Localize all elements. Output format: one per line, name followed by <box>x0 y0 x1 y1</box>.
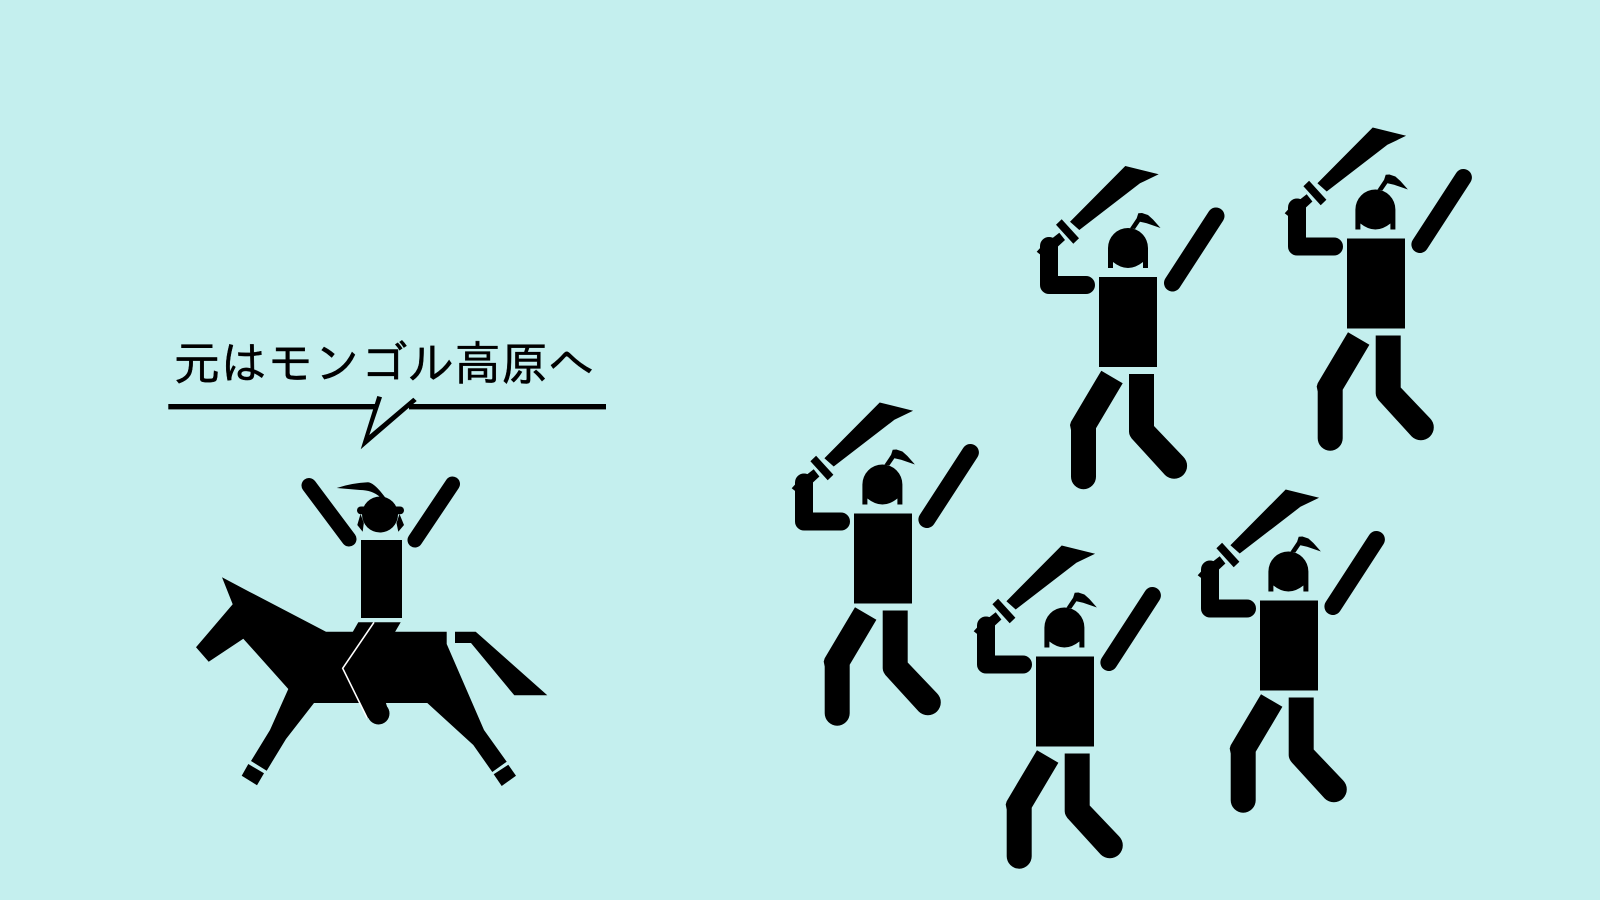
rider left arm <box>309 486 349 539</box>
warrior 5 <box>1198 490 1376 813</box>
head <box>1044 592 1097 648</box>
sword <box>1297 128 1406 208</box>
head <box>1268 536 1321 592</box>
raised arm <box>1109 596 1152 662</box>
horse and rider <box>196 482 547 786</box>
raised arm <box>1172 216 1216 283</box>
body <box>1347 238 1405 328</box>
warrior 2 <box>1285 128 1463 451</box>
rider body <box>361 540 402 618</box>
raised arm <box>1420 178 1463 244</box>
raised arm <box>927 452 970 520</box>
warrior 3 <box>792 402 970 726</box>
legs <box>824 607 941 726</box>
head <box>1355 174 1408 230</box>
head <box>1108 213 1160 268</box>
sword arm <box>1285 208 1334 246</box>
body <box>1036 656 1094 746</box>
sword <box>986 546 1095 626</box>
warrior 4 <box>974 546 1152 869</box>
body <box>1099 277 1157 367</box>
sword arm <box>792 482 841 522</box>
horse tail <box>455 632 547 695</box>
horse rear hoof <box>494 765 516 786</box>
rider head <box>337 482 404 532</box>
sword <box>804 402 913 483</box>
legs <box>1230 694 1347 813</box>
rider leg <box>343 622 401 724</box>
sword arm <box>1037 246 1086 285</box>
heading: speech text: 元はモンゴル高原へ <box>174 338 595 390</box>
sword arm <box>974 626 1023 664</box>
speech line with lightning tail <box>168 396 606 449</box>
sword <box>1210 490 1319 570</box>
sword arm <box>1198 570 1247 608</box>
horse front hoof <box>242 764 264 785</box>
horse body <box>196 577 507 772</box>
body <box>854 514 912 604</box>
body <box>1260 600 1318 690</box>
raised arm <box>1333 540 1376 606</box>
warrior 1 <box>1037 166 1216 489</box>
legs <box>1317 332 1434 451</box>
legs <box>1070 371 1187 489</box>
head <box>862 450 915 504</box>
sword <box>1050 166 1159 247</box>
legs <box>1006 750 1123 869</box>
rider right arm <box>415 484 452 540</box>
